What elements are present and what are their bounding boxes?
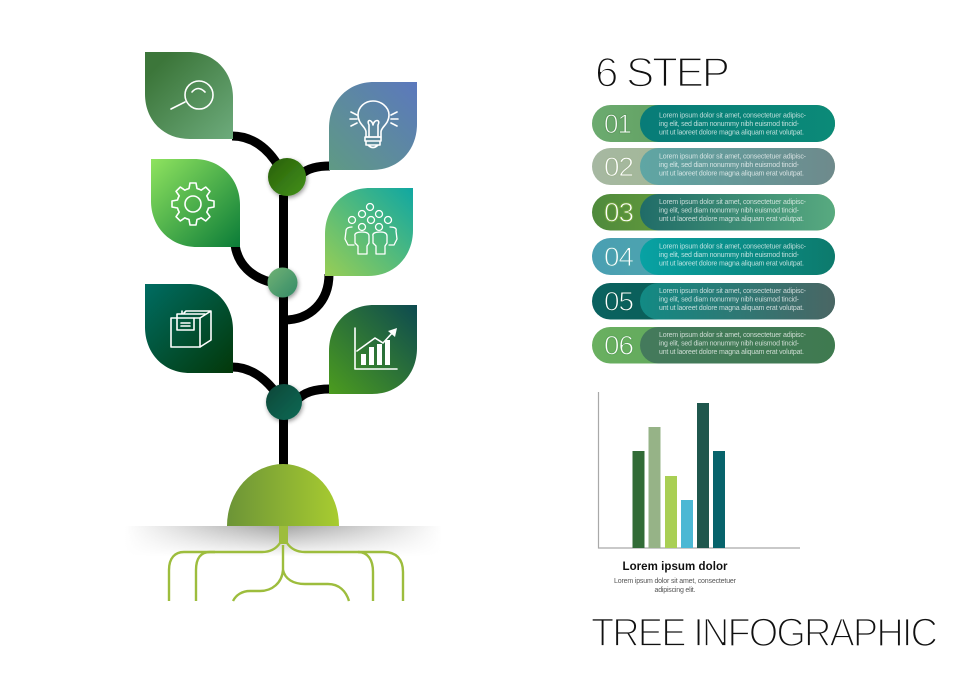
bar chart — [598, 392, 800, 548]
step 02: 02 — [604, 152, 633, 182]
step 04: unt ut laoreet dolore magna aliquam erat volutpat. — [659, 260, 804, 268]
step 01: Lorem ipsum dolor sit amet, consectetuer adipisc- — [659, 112, 807, 120]
step 06: 06 — [604, 330, 633, 360]
leaf: idea — [329, 82, 417, 170]
leaf: archive — [145, 284, 233, 373]
chart caption heading: Lorem ipsum dolor — [622, 561, 728, 573]
step 01: ing elit, sed diam nonummy nibh euismod tincid- — [659, 121, 800, 128]
step 01: unt ut laoreet dolore magna aliquam erat volutpat. — [659, 130, 804, 136]
leaf: search — [145, 52, 233, 139]
leaf: growth chart — [329, 305, 417, 394]
step 03: 03 — [604, 198, 633, 228]
node circle 1 — [268, 158, 306, 196]
step 06 — [592, 327, 835, 364]
step 01: 01 — [604, 109, 631, 139]
step 06: unt ut laoreet dolore magna aliquam erat volutpat. — [659, 349, 804, 356]
chart caption body — [614, 578, 737, 594]
soil dome — [227, 464, 339, 526]
step 02: ing elit, sed diam nonummy nibh euismod tincid- — [659, 162, 800, 169]
step 03: Lorem ipsum dolor sit amet, consectetuer adipisc- — [659, 199, 807, 206]
step 04: Lorem ipsum dolor sit amet, consectetuer adipisc- — [659, 244, 807, 250]
icon: archive box — [171, 311, 211, 347]
step 03: ing elit, sed diam nonummy nibh euismod tincid- — [659, 208, 800, 214]
node circle 3 — [266, 384, 302, 420]
node circle 2 — [268, 268, 298, 298]
leaf: team — [325, 188, 413, 276]
step 06: ing elit, sed diam nonummy nibh euismod tincid- — [659, 340, 800, 348]
icon: light bulb — [350, 101, 398, 148]
step 04: 04 — [604, 242, 634, 272]
step 05: ing elit, sed diam nonummy nibh euismod tincid- — [659, 296, 800, 304]
roots — [169, 526, 403, 601]
step 05 — [592, 283, 835, 320]
step 02 — [592, 148, 835, 185]
chart caption body: Lorem ipsum dolor sit amet, consectetuer — [614, 578, 737, 585]
step 02: Lorem ipsum dolor sit amet, consectetuer adipisc- — [659, 154, 807, 160]
step 01 — [592, 105, 835, 142]
step 04: ing elit, sed diam nonummy nibh euismod tincid- — [659, 252, 800, 259]
footer title: TREE INFOGRAPHIC — [591, 611, 937, 655]
icon: rising chart — [355, 328, 397, 369]
leaf: settings — [151, 159, 240, 247]
heading: 6 STEP: 6 STEP — [595, 48, 728, 96]
step 03: unt ut laoreet dolore magna aliquam erat volutpat. — [659, 216, 804, 223]
branches and trunk — [232, 136, 330, 465]
step 05: unt ut laoreet dolore magna aliquam erat volutpat. — [659, 305, 804, 312]
step 06: Lorem ipsum dolor sit amet, consectetuer adipisc- — [659, 332, 807, 339]
icon: gear — [172, 183, 214, 225]
chart caption body: adipiscing elit. — [654, 587, 696, 594]
ground shadow — [125, 526, 442, 556]
step 05: Lorem ipsum dolor sit amet, consectetuer adipisc- — [659, 288, 807, 295]
icon: magnifier — [171, 81, 213, 109]
step 05: 05 — [604, 286, 633, 316]
step 03 — [592, 194, 835, 230]
step 04 — [592, 238, 835, 275]
icon: people — [345, 204, 397, 254]
step 02: unt ut laoreet dolore magna aliquam erat volutpat. — [659, 170, 804, 178]
